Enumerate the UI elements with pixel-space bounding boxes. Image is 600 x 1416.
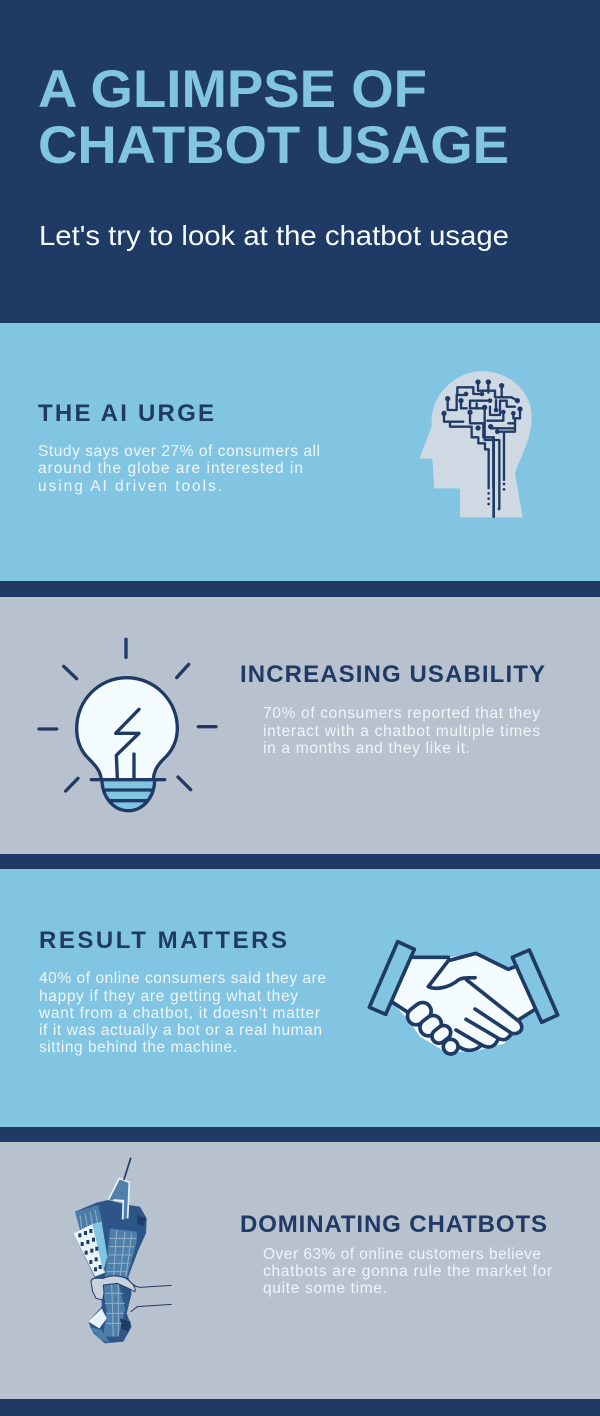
panel: the AI urge (0, 323, 600, 581)
text: result matters: sitting behind the machine. (39, 1039, 237, 1056)
heading: result matters: RESULT MATTERS (39, 927, 287, 954)
panel: increasing usability (0, 597, 600, 854)
text: dominating chatbots: chatbots are gonna rule the market for (263, 1263, 552, 1280)
text: dominating chatbots (263, 1246, 552, 1297)
text: result matters: happy if they are getting what they (39, 988, 298, 1005)
heading: dominating chatbots: DOMINATING CHATBOTS (240, 1211, 547, 1238)
text: the AI urge (38, 443, 320, 495)
heading: increasing usability: INCREASING USABILITY (240, 661, 545, 688)
text: result matters: want from a chatbot, it doesn't matter (38, 1005, 320, 1022)
panel: dominating chatbots (0, 1142, 600, 1399)
text: increasing usability: in a months and they like it. (263, 740, 470, 757)
text: the AI urge: Study says over 27% of consumers all (38, 443, 320, 460)
icon: circuit brain head (419, 371, 532, 517)
title: A GLIMPSE OF (38, 60, 427, 119)
subtitle: Let's try to look at the chatbot usage (39, 220, 509, 251)
header panel (0, 0, 600, 323)
title (38, 60, 509, 175)
text: dominating chatbots: Over 63% of online customers believe (263, 1246, 541, 1263)
text: dominating chatbots: quite some time. (263, 1280, 387, 1297)
heading: the AI urge: THE AI URGE (38, 400, 214, 427)
text: the AI urge: around the globe are interested in (38, 460, 303, 477)
icon: handshake (369, 942, 558, 1055)
icon: hand gripping buildings (73, 1158, 172, 1343)
text: the AI urge: using AI driven tools. (38, 478, 222, 495)
icon: light bulb (39, 639, 216, 811)
text: increasing usability: interact with a chatbot multiple times (263, 723, 540, 740)
text: increasing usability (263, 705, 540, 757)
text: result matters: 40% of online consumers said they are (39, 970, 326, 987)
title: CHATBOT USAGE (38, 116, 509, 175)
text: result matters: if it was actually a bot or a real human (39, 1022, 322, 1039)
text: result matters (38, 970, 326, 1056)
text: increasing usability: 70% of consumers reported that they (263, 705, 540, 722)
panel: result matters (0, 869, 600, 1127)
